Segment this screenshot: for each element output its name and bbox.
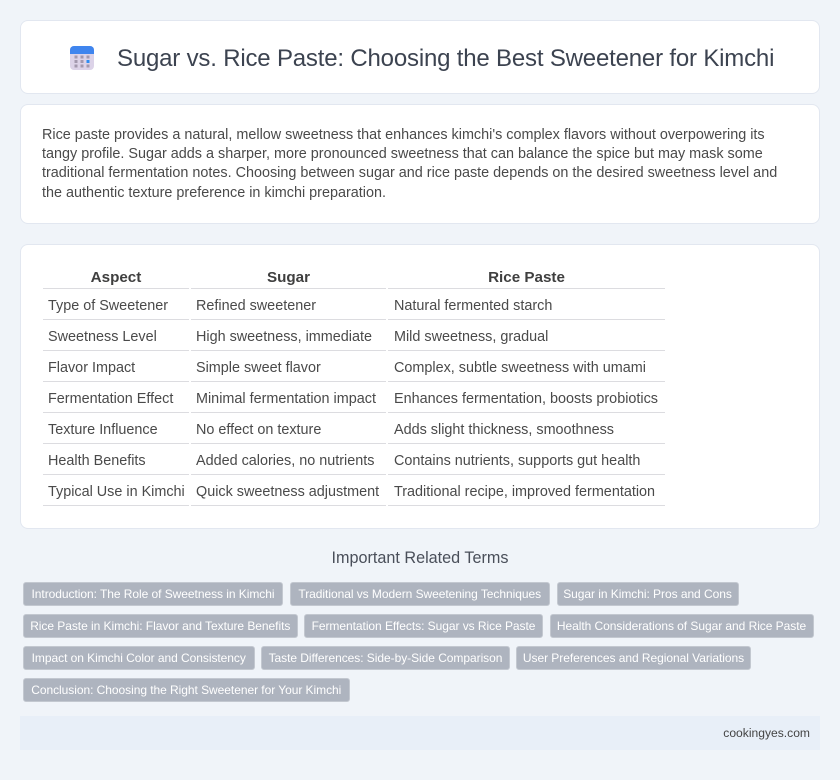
- row: type of sweetener: [48, 298, 552, 314]
- comparison table: [43, 269, 665, 506]
- row: texture influence: Texture Influence: [48, 422, 158, 438]
- tag: User Preferences and Regional Variations: [523, 651, 744, 665]
- tag: Conclusion: Choosing the Right Sweetener for Your Kimchi: [31, 683, 341, 697]
- tag: [23, 614, 298, 638]
- title: Sugar vs. Rice Paste: Choosing the Best Sweetener for Kimchi: [117, 45, 774, 72]
- row: sweetness level: [48, 329, 548, 345]
- tag: Health Considerations of Sugar and Rice Paste: [557, 619, 806, 633]
- row: health benefits: Health Benefits: [48, 453, 146, 469]
- intro text: the authentic texture preference in kimchi preparation.: [42, 185, 386, 201]
- row: health benefits: Added calories, no nutrients: [196, 453, 374, 469]
- row: sweetness level: Mild sweetness, gradual: [394, 329, 548, 345]
- header panel: [20, 20, 820, 94]
- table panel: [20, 244, 820, 529]
- intro text: traditional fermentation notes. Choosing between sugar and rice paste depends on the desired sweetness level and: [42, 165, 777, 181]
- row: flavor impact: Complex, subtle sweetness with umami: [394, 360, 646, 376]
- tag: [550, 614, 814, 638]
- row: health benefits: [48, 453, 640, 469]
- row: typical use: Quick sweetness adjustment: [196, 484, 379, 500]
- tag: [23, 678, 350, 702]
- row: texture influence: No effect on texture: [196, 422, 321, 438]
- row: sweetness level: High sweetness, immediate: [196, 329, 372, 345]
- intro panel: [20, 104, 820, 224]
- tag: [23, 646, 254, 670]
- footer credit: cookingyes.com: [723, 726, 810, 740]
- row: texture influence: [48, 422, 614, 438]
- row: type of sweetener: Type of Sweetener: [48, 298, 168, 314]
- row: sweetness level: Sweetness Level: [48, 329, 157, 345]
- tag: Fermentation Effects: Sugar vs Rice Paste: [312, 619, 535, 633]
- tag: Introduction: The Role of Sweetness in Kimchi: [32, 587, 274, 601]
- tag: Traditional vs Modern Sweetening Techniques: [298, 587, 541, 601]
- row: texture influence: Adds slight thickness, smoothness: [394, 422, 614, 438]
- row: fermentation effect: Fermentation Effect: [48, 391, 173, 407]
- tag: Taste Differences: Side-by-Side Comparison: [269, 651, 502, 665]
- tag: [516, 646, 751, 670]
- header row: Sugar: [267, 269, 310, 286]
- intro text: tangy profile. Sugar adds a sharper, more pronounced sweetness that can balance the spice but may mask some: [42, 146, 763, 162]
- tag: [556, 582, 738, 606]
- row: flavor impact: Flavor Impact: [48, 360, 135, 376]
- tag: Impact on Kimchi Color and Consistency: [32, 651, 246, 665]
- tag: Rice Paste in Kimchi: Flavor and Texture Benefits: [30, 619, 290, 633]
- row: health benefits: Contains nutrients, supports gut health: [394, 453, 640, 469]
- row: typical use: Typical Use in Kimchi: [48, 484, 185, 500]
- footer bar: [20, 716, 820, 750]
- row: fermentation effect: Enhances fermentation, boosts probiotics: [394, 391, 658, 407]
- row: fermentation effect: [48, 391, 658, 407]
- related term tags: [23, 582, 814, 702]
- row: typical use: [48, 484, 655, 500]
- intro text: [42, 127, 777, 201]
- related terms heading: Important Related Terms: [332, 549, 508, 567]
- header row: Aspect: [91, 269, 141, 286]
- tag: [261, 646, 510, 670]
- row: flavor impact: Simple sweet flavor: [196, 360, 321, 376]
- row: type of sweetener: Natural fermented starch: [394, 298, 552, 314]
- tag: [23, 582, 283, 606]
- tag: [304, 614, 543, 638]
- tag: [290, 582, 550, 606]
- row: flavor impact: [48, 360, 646, 376]
- icon: calendar: [70, 46, 94, 70]
- header row: [91, 269, 565, 286]
- row: typical use: Traditional recipe, improved fermentation: [394, 484, 655, 500]
- row: fermentation effect: Minimal fermentation impact: [196, 391, 376, 407]
- row: type of sweetener: Refined sweetener: [196, 298, 316, 314]
- intro text: Rice paste provides a natural, mellow sweetness that enhances kimchi's complex flavors without overpowering its: [42, 127, 765, 143]
- header row: Rice Paste: [488, 269, 565, 286]
- tag: Sugar in Kimchi: Pros and Cons: [563, 587, 732, 601]
